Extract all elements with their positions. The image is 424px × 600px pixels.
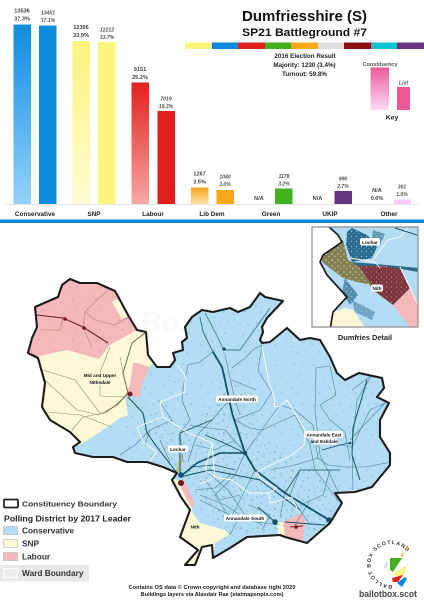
conservative polling districts xyxy=(28,279,390,565)
footer credits xyxy=(128,584,296,598)
election result text: Majority: 1230 (3.4%) xyxy=(273,62,336,69)
legend: heading: Polling District by 2017 Leader xyxy=(4,514,131,524)
roads: SNP and Labour wards xyxy=(43,347,125,430)
inset coast xyxy=(312,228,346,326)
labour district: Annan xyxy=(283,513,305,541)
Conservative bars: 37.3% xyxy=(14,16,30,22)
footer credits: Contains OS data © Crown copyright and database right 2020 xyxy=(128,584,296,591)
election result text: Turnout: 59.8% xyxy=(282,71,327,78)
Conservative bars: 13536 xyxy=(14,8,30,14)
SNP bars: 12306 xyxy=(73,25,89,31)
inset labour area xyxy=(370,266,418,326)
map label: Annandale South xyxy=(224,514,266,522)
logo: map of Scotland xyxy=(383,545,408,587)
inset ward lines xyxy=(350,228,418,305)
map label: Annandale East and Eskdale: Annandale East xyxy=(306,432,342,437)
Green bars: 3.2% xyxy=(278,182,290,188)
constituency map xyxy=(20,270,400,570)
inset snp buildings xyxy=(322,240,372,285)
SNP bars xyxy=(72,25,116,218)
snp notch xyxy=(112,299,128,319)
inset labour buildings xyxy=(358,265,410,305)
labour district: Sanquhar side xyxy=(125,363,149,397)
Labour bars: 7019 xyxy=(160,96,172,102)
map label: Lochar xyxy=(168,446,188,452)
Conservative bars: 37.1% xyxy=(41,18,56,24)
legend: conservative: Conservative xyxy=(22,526,74,536)
map label: Annandale North: Annandale North xyxy=(218,397,256,402)
inset map: Dumfries detail: Nith xyxy=(372,286,382,291)
title xyxy=(242,8,367,39)
title: Dumfriesshire (S) xyxy=(242,8,367,25)
constituency boundary outline xyxy=(28,279,390,565)
section divider bar xyxy=(0,220,424,223)
Lib Dem bars: 3.0% xyxy=(219,182,231,188)
key: Constituency xyxy=(363,62,398,68)
SNP bars: 33.9% xyxy=(73,33,89,39)
map label: Annandale North xyxy=(216,396,258,402)
SNP bars: 12212 xyxy=(100,28,114,34)
party colour strip xyxy=(185,42,424,49)
Lib Dem bars: 1267 xyxy=(193,172,206,178)
logo: Ballot Box Scotland: ballotbox.scot xyxy=(359,589,417,599)
map label: Lochar: Lochar xyxy=(170,447,186,452)
Labour bars: 19.3% xyxy=(159,104,174,110)
footer credits: Buildings layers via Alasdair Rae (statmapsnpix.com) xyxy=(140,592,284,598)
Green bars xyxy=(254,174,292,218)
Green bars: N/A xyxy=(254,196,264,202)
scattered buildings: other wards xyxy=(50,339,144,444)
map label: Nith xyxy=(189,524,201,530)
legend: snp: SNP xyxy=(22,539,40,549)
map label: Annandale East and Eskdale: and Eskdale xyxy=(310,439,338,444)
scattered buildings: blue, sparse xyxy=(122,300,386,548)
Lib Dem bars: 1080 xyxy=(219,174,231,180)
axis line xyxy=(5,203,419,206)
SNP bars: 33.7% xyxy=(100,35,115,41)
legend: ward boundary: Ward Boundary xyxy=(22,568,84,578)
legend: labour: Labour xyxy=(22,552,51,562)
Other bars xyxy=(371,184,411,218)
Other bars: 0.0% xyxy=(371,196,383,202)
inset conservative buildings xyxy=(346,228,378,262)
SNP bars: SNP xyxy=(87,211,101,218)
Lib Dem bars xyxy=(191,172,234,218)
map label: Mid and Upper Nithsdale: Nithsdale xyxy=(89,380,111,385)
bar chart: votes by party xyxy=(5,8,419,218)
Other bars: 361 xyxy=(398,184,406,190)
inset snp area south xyxy=(332,308,364,326)
snp district: Annan xyxy=(277,522,285,536)
Green bars: 1178 xyxy=(279,174,290,180)
inset caption: Dumfries Detail xyxy=(338,333,392,342)
main roads: blue xyxy=(128,308,367,525)
map label: Annandale East and Eskdale xyxy=(305,431,343,444)
Labour bars: Labour xyxy=(142,211,164,218)
labour district: north west xyxy=(29,280,136,359)
inset boundary line xyxy=(320,226,347,330)
key xyxy=(363,62,410,122)
legend: constituency boundary: Constituency Boundary xyxy=(22,500,118,509)
inset labels: Lochar xyxy=(362,240,378,245)
logo: Ballot Box Scotland xyxy=(359,540,417,599)
Conservative bars: Conservative xyxy=(15,211,56,218)
logo: Ballot Box Scotland: BALLOT BOX SCOTLAND xyxy=(366,540,409,589)
UKIP bars: N/A xyxy=(313,196,322,202)
key: List xyxy=(399,80,408,86)
title: SP21 Battleground #7 xyxy=(242,27,367,39)
Lib Dem bars: 3.5% xyxy=(193,180,206,186)
thin roads: blue xyxy=(120,345,392,535)
Other bars: N/A xyxy=(372,188,382,194)
Lib Dem bars: Lib Dem xyxy=(199,211,225,218)
election result text xyxy=(273,53,337,78)
snp district: Mid and Upper Nithsdale xyxy=(30,330,153,445)
labour strip xyxy=(178,480,194,509)
white ward boundaries xyxy=(137,347,305,513)
watermark: Ballot Box xyxy=(48,306,198,339)
map label: Nith: Nith xyxy=(190,524,200,530)
legend xyxy=(0,500,131,582)
key: Key xyxy=(386,114,398,122)
UKIP bars xyxy=(313,176,352,218)
UKIP bars: 990 xyxy=(339,176,347,182)
scattered buildings: blue, dense xyxy=(135,380,340,535)
map label: Mid and Upper Nithsdale: Mid and Upper xyxy=(84,373,116,378)
UKIP bars: 2.7% xyxy=(336,184,349,190)
Labour bars: 25.2% xyxy=(132,75,148,81)
map label: Annandale South: Annandale South xyxy=(226,516,264,521)
map label: Mid and Upper Nithsdale xyxy=(82,372,118,385)
inset frame xyxy=(312,227,418,327)
Other bars: Other xyxy=(380,211,398,218)
Other bars: 1.0% xyxy=(396,192,408,198)
Conservative bars xyxy=(14,8,56,218)
Labour bars xyxy=(132,67,175,218)
election result text: 2016 Election Result xyxy=(274,53,337,60)
UKIP bars: UKIP xyxy=(322,211,338,218)
Green bars: Green xyxy=(262,211,280,218)
snp district: Nith xyxy=(173,479,229,564)
inset map: Dumfries detail xyxy=(311,226,419,340)
Conservative bars: 13451 xyxy=(41,10,55,16)
Labour bars: 9151 xyxy=(134,67,146,73)
snp lochar strip xyxy=(176,455,183,472)
